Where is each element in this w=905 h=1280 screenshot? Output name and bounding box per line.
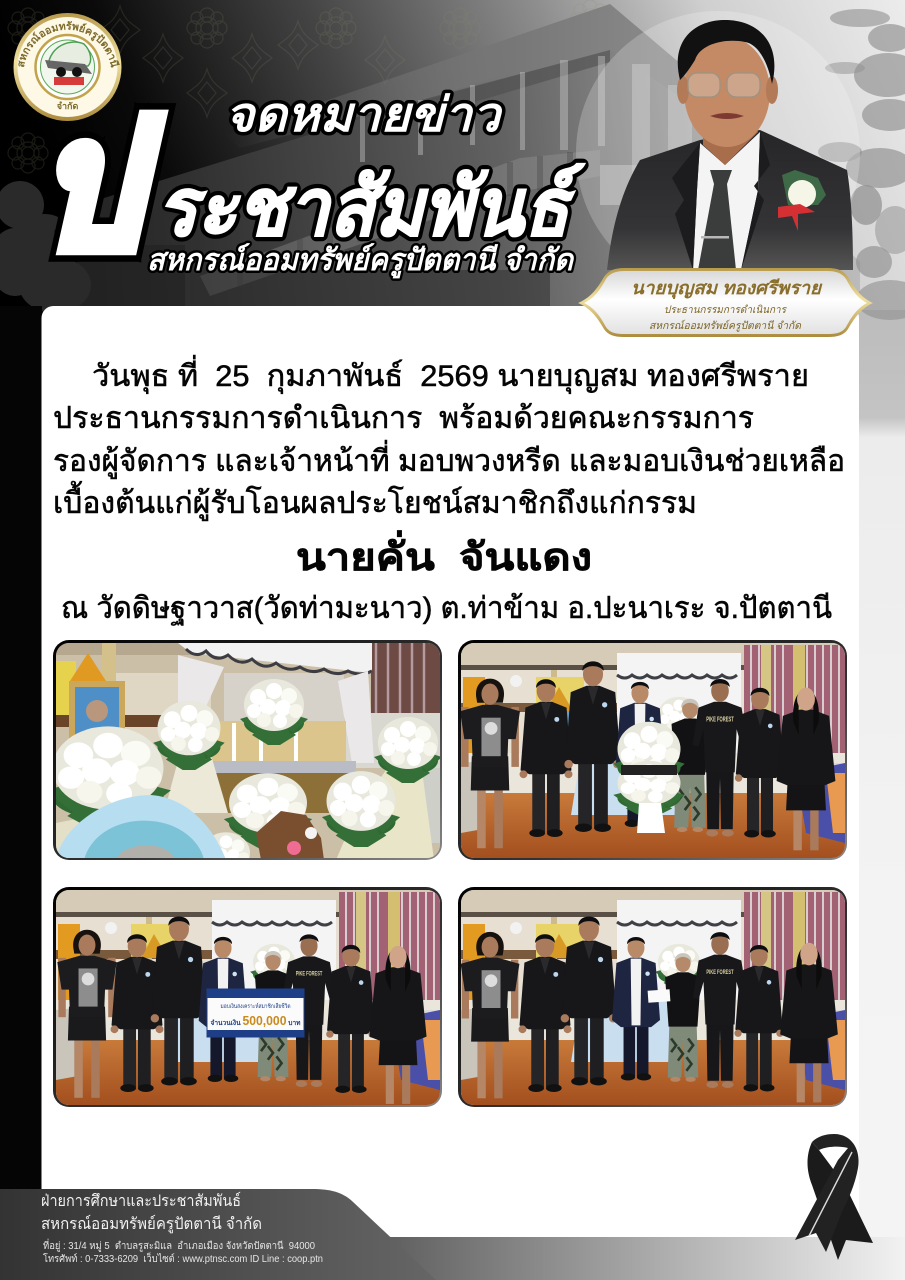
plate name: นายบุญสม ทองศรีพราย [631, 278, 823, 300]
title: large initial: ป [39, 88, 162, 284]
title: large initial: ป [39, 88, 162, 284]
left margin bar [0, 306, 42, 1196]
right margin strip [855, 300, 905, 1280]
board amount: จำนวนเงิน 500,000 บาท [211, 1013, 301, 1028]
building [65, 4, 860, 306]
deceased name: นายคั่น จันแดง [296, 530, 592, 579]
logo ribbon [54, 77, 84, 85]
title: newsletter: จดหมายข่าว [225, 89, 503, 142]
flower clusters [153, 701, 225, 770]
boutonniere [778, 170, 826, 231]
header banner [0, 0, 905, 320]
paper flower [256, 811, 324, 860]
white cloth pedestals [168, 757, 228, 813]
hair [678, 20, 774, 84]
group of people [57, 916, 427, 1104]
main content card [42, 306, 859, 1246]
header gradient [0, 0, 905, 310]
footer department: ฝ่ายการศึกษาและประชาสัมพันธ์ [41, 1191, 241, 1210]
photo 3: donation cheque [53, 887, 444, 1107]
portrait circle [576, 11, 860, 295]
footer address: ที่อยู่ : 31/4 หมู่ 5 ตำบลรูสะมิแล อำเภอเมือง จังหวัดปัตตานี 94000 [43, 1238, 315, 1252]
jacket [607, 130, 853, 270]
blue wreath [56, 795, 226, 860]
photo 4: envelope handover [458, 887, 849, 1107]
smile [710, 113, 744, 119]
footer contact: โทรศัพท์ : 0-7333-6209 เว็บไซต์ : www.ptnsc.com ID Line : coop.ptn [43, 1251, 323, 1265]
plate role: ประธานกรรมการดำเนินการ [664, 304, 787, 316]
venue: ณ วัดดิษฐาวาส(วัดท่ามะนาว) ต.ท่าข้าม อ.ปะนาเระ จ.ปัตตานี [61, 592, 832, 626]
photo 2: wreath presentation [458, 640, 849, 860]
logo cannon [45, 60, 92, 74]
canopy [178, 643, 372, 673]
board caption: มอบเงินสงเคราะห์สมาชิกเสียชีวิต [220, 1002, 291, 1010]
title: cooperative name: สหกรณ์ออมทรัพย์ครูปัตตานี จำกัด [147, 243, 574, 279]
line 2: ประธานกรรมการดำเนินการ พร้อมด้วยคณะกรรมการ [53, 402, 754, 435]
footer contact panel [0, 1189, 436, 1280]
logo seal [14, 13, 122, 121]
wreath [613, 722, 685, 833]
group of people [460, 661, 835, 850]
line 3: รองผู้จัดการ และเจ้าหน้าที่ มอบพวงหรีด และมอบเงินช่วยเหลือ [53, 440, 845, 479]
tie [698, 170, 736, 270]
glasses [688, 73, 760, 97]
footer gradient strip [380, 1237, 905, 1280]
announcement text [53, 355, 845, 626]
logo text: สหกรณ์ออมทรัพย์ครูปัตตานี [18, 21, 120, 68]
left tree [0, 181, 91, 313]
donation board [207, 989, 304, 1037]
group of people [461, 916, 838, 1102]
photo 1: funeral flowers [53, 640, 442, 860]
name plate [578, 268, 873, 337]
black ribbon icon [795, 1134, 873, 1260]
neck [703, 115, 758, 165]
coffin [206, 721, 346, 761]
title: public relations: ระชาสัมพันธ์ [157, 163, 586, 252]
footer organisation: สหกรณ์ออมทรัพย์ครูปัตตานี จำกัด [41, 1214, 262, 1234]
portrait of chairman [607, 20, 853, 270]
portrait frame [70, 653, 106, 681]
line 4: เบื้องต้นแก่ผู้รับโอนผลประโยชน์สมาชิกถึงแก่กรรม [53, 481, 697, 521]
shirt [693, 132, 760, 270]
line 1: วันพุธ ที่ 25 กุมภาพันธ์ 2569 นายบุญสม ทองศรีพราย [92, 355, 809, 395]
plate organisation: สหกรณ์ออมทรัพย์ครูปัตตานี จำกัด [649, 319, 802, 332]
face [684, 37, 770, 147]
right tree [818, 9, 905, 320]
ornament pattern [8, 0, 610, 173]
logo seal: จำกัด [57, 101, 78, 111]
envelope [648, 989, 670, 1003]
lapels [672, 132, 770, 270]
logo hill [48, 42, 91, 66]
title: public relations: ระชาสัมพันธ์ [157, 163, 586, 252]
